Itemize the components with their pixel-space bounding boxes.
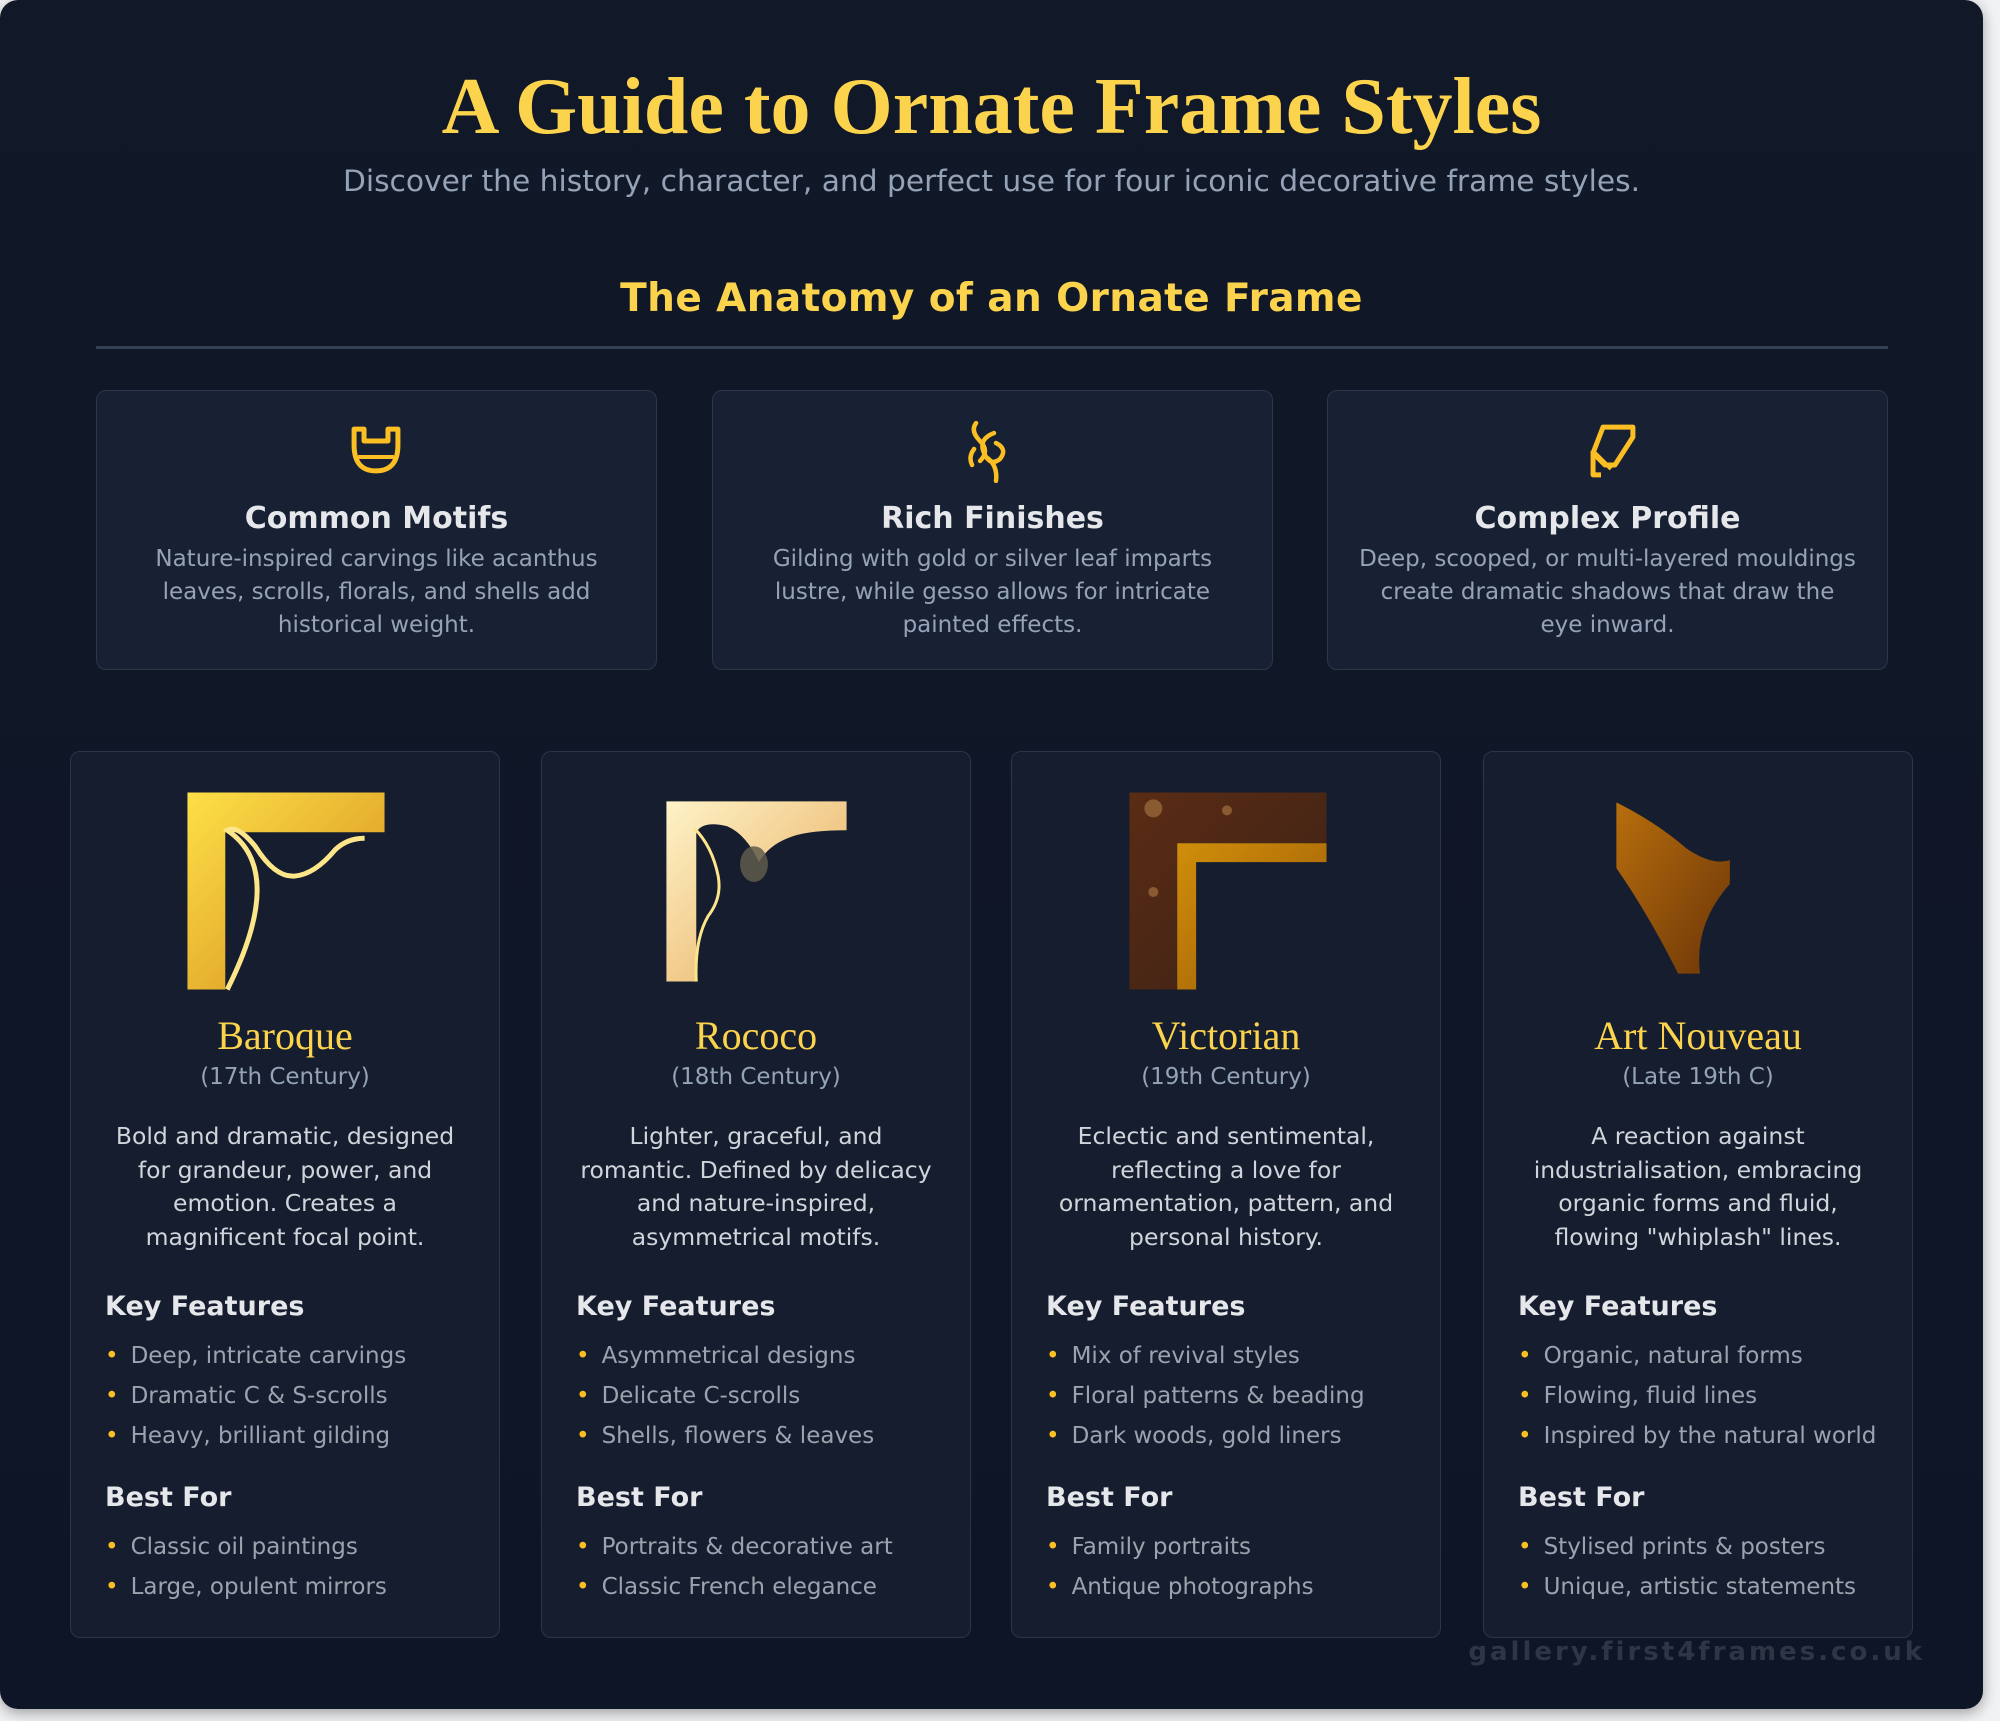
panel: baroque [70,751,500,1638]
feature list: Organic, natural forms [1544,1343,1803,1369]
icon: baroque frame [187,792,385,991]
icon: profile [1590,424,1636,478]
text: Deep, scooped, or multi-layered mouldings create dramatic shadows that draw the eye inward. [1359,546,1856,638]
name: Rococo [695,1013,817,1058]
best for heading: Best For [1518,1482,1644,1513]
feature list [1521,1343,1876,1449]
feature list: Inspired by the natural world [1544,1423,1876,1449]
feature list: Asymmetrical designs [602,1343,855,1369]
era: (17th Century) [200,1064,370,1090]
panel: victorian [1011,751,1441,1638]
icon: art nouveau frame [1616,802,1730,974]
name: Victorian [1152,1013,1300,1058]
description: Bold and dramatic, designed for grandeur, power, and emotion. Creates a magnificent focal point. [116,1122,454,1250]
icon: rococo frame [666,801,847,982]
feature list: Deep, intricate carvings [131,1343,406,1369]
feature list: Dark woods, gold liners [1072,1423,1342,1449]
section heading: The Anatomy of an Ornate Frame [620,276,1363,321]
era: (18th Century) [671,1064,841,1090]
panel: common motifs [96,390,657,670]
watermark: gallery.first4frames.co.uk [1468,1637,1925,1667]
heading: Common Motifs [245,501,508,536]
best for list: Unique, artistic statements [1544,1574,1856,1600]
best for list: Portraits & decorative art [602,1534,893,1560]
feature list: Heavy, brilliant gilding [131,1423,390,1449]
feature list: Shells, flowers & leaves [602,1423,874,1449]
feature list: Delicate C-scrolls [602,1383,800,1409]
description: Eclectic and sentimental, reflecting a love for ornamentation, pattern, and personal history. [1059,1122,1393,1250]
best for list: Stylised prints & posters [1544,1534,1825,1560]
era: (Late 19th C) [1622,1064,1774,1090]
heading: Rich Finishes [881,501,1104,536]
description: Lighter, graceful, and romantic. Defined by delicacy and nature-inspired, asymmetrical motifs. [580,1122,932,1250]
feature list [579,1343,874,1449]
key features heading: Key Features [576,1291,775,1322]
key features heading: Key Features [105,1291,304,1322]
feature list: Dramatic C & S-scrolls [131,1383,388,1409]
icon: motif [352,426,400,474]
feature list: Floral patterns & beading [1072,1383,1365,1409]
feature list [1049,1343,1365,1449]
icon: scroll [968,420,1006,483]
name: Baroque [217,1013,353,1058]
feature list: Mix of revival styles [1072,1343,1300,1369]
era: (19th Century) [1141,1064,1311,1090]
subtitle: Discover the history, character, and perfect use for four iconic decorative frame styles. [343,164,1640,199]
text: Nature-inspired carvings like acanthus leaves, scrolls, florals, and shells add historical weight. [155,546,598,638]
best for list: Classic French elegance [602,1574,877,1600]
best for list: Family portraits [1072,1534,1251,1560]
feature list [108,1343,406,1449]
panel: rococo [541,751,971,1638]
key features heading: Key Features [1046,1291,1245,1322]
feature list: Flowing, fluid lines [1544,1383,1757,1409]
best for list [108,1534,387,1600]
description: A reaction against industrialisation, embracing organic forms and fluid, flowing "whiplash" lines. [1534,1122,1862,1250]
best for heading: Best For [1046,1482,1172,1513]
icon: victorian frame [1130,792,1327,990]
best for list: Antique photographs [1072,1574,1314,1600]
best for list: Classic oil paintings [131,1534,358,1560]
panel: complex profile [1327,390,1888,670]
best for heading: Best For [105,1482,231,1513]
name: Art Nouveau [1594,1013,1802,1058]
best for list: Large, opulent mirrors [131,1574,387,1600]
heading: Complex Profile [1474,501,1741,536]
text: Gilding with gold or silver leaf imparts lustre, while gesso allows for intricate painted effects. [773,546,1212,638]
panel: art nouveau [1483,751,1913,1638]
key features heading: Key Features [1518,1291,1717,1322]
best for heading: Best For [576,1482,702,1513]
best for list [1521,1534,1856,1600]
best for list [579,1534,893,1600]
panel: rich finishes [712,390,1273,670]
best for list [1049,1534,1314,1600]
title: A Guide to Ornate Frame Styles [442,63,1541,151]
